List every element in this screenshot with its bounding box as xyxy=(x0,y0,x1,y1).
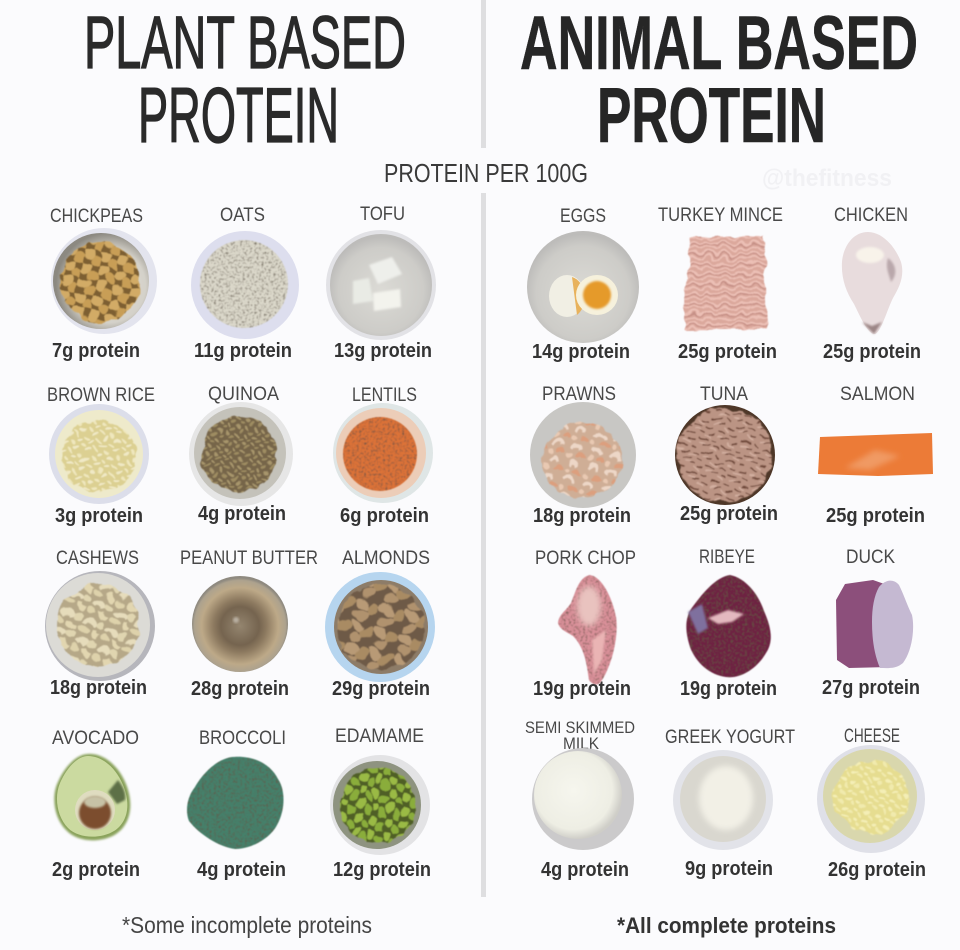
icon: bowl of prawns xyxy=(530,402,636,508)
icon: bowl of edamame xyxy=(330,755,430,855)
subtitle: PROTEIN PER 100G xyxy=(384,158,588,188)
card: semi skimmed milk xyxy=(525,718,635,881)
card: salmon: SALMON xyxy=(840,384,915,405)
watermark: @thefitness xyxy=(762,165,892,192)
icon: ribeye steak xyxy=(686,575,771,677)
card: peanut butter: PEANUT BUTTER xyxy=(180,548,318,569)
heading: animal based protein: PROTEIN xyxy=(597,71,826,159)
card: edamame: EDAMAME xyxy=(335,726,424,747)
card: cashews xyxy=(45,548,155,699)
card: avocado: 2g protein xyxy=(52,859,140,881)
card: almonds xyxy=(325,548,435,700)
card: eggs xyxy=(527,206,639,363)
card: turkey mince: 25g protein xyxy=(678,341,777,363)
card: ribeye xyxy=(680,547,777,700)
card: edamame xyxy=(330,726,431,881)
icon: turkey mince xyxy=(684,236,767,330)
card: ribeye: 19g protein xyxy=(680,678,777,700)
icon: bowl of almonds xyxy=(325,572,435,682)
card: greek yogurt xyxy=(665,727,795,880)
icon: broccoli xyxy=(187,757,284,849)
card: duck: 27g protein xyxy=(822,677,920,699)
heading: plant based protein: PROTEIN xyxy=(138,71,339,159)
card: oats: 11g protein xyxy=(194,340,292,362)
card: lentils: 6g protein xyxy=(340,505,429,527)
icon: bowl with boiled egg xyxy=(527,231,639,343)
card: broccoli: BROCCOLI xyxy=(199,728,286,749)
panel: animal based foods xyxy=(525,205,933,881)
card: duck: DUCK xyxy=(846,547,895,568)
card: tuna: TUNA xyxy=(700,384,748,405)
card: pork chop xyxy=(533,548,636,700)
card: cheese xyxy=(817,726,926,881)
card: chicken xyxy=(823,205,921,363)
card: chickpeas xyxy=(50,206,157,362)
card: broccoli: 4g protein xyxy=(197,859,286,881)
card: peanut butter: 28g protein xyxy=(191,678,289,700)
card: quinoa xyxy=(189,384,293,525)
heading: plant based protein: PLANT BASED xyxy=(84,1,406,84)
card: turkey mince xyxy=(658,205,783,363)
card: eggs: 14g protein xyxy=(532,341,630,363)
card: salmon xyxy=(818,384,933,527)
icon: bowl of lentils xyxy=(333,403,433,503)
icon: bowl of greek yogurt xyxy=(673,750,773,850)
card: chickpeas: 7g protein xyxy=(52,340,140,362)
card: oats: OATS xyxy=(220,205,265,226)
card: tuna: 25g protein xyxy=(680,503,778,525)
icon: duck breasts xyxy=(836,580,913,668)
card: brown rice: 3g protein xyxy=(55,505,143,527)
icon: salmon fillet xyxy=(818,433,933,476)
card: almonds: ALMONDS xyxy=(342,548,430,569)
card: duck xyxy=(822,547,920,699)
card: oats xyxy=(191,205,299,362)
card: semi skimmed milk: 4g protein xyxy=(541,859,629,881)
card: pork chop: PORK CHOP xyxy=(535,548,636,569)
card: edamame: 12g protein xyxy=(333,859,431,881)
card: greek yogurt: 9g protein xyxy=(685,858,773,880)
card: prawns: 18g protein xyxy=(533,505,631,527)
icon: bowl of quinoa xyxy=(189,402,293,506)
card: lentils: LENTILS xyxy=(352,385,417,406)
footnote: plant: *Some incomplete proteins xyxy=(122,912,372,938)
card: cheese: 26g protein xyxy=(828,859,926,881)
icon: bowl of oats xyxy=(191,231,299,339)
card: eggs: EGGS xyxy=(560,206,606,227)
icon: jar of peanut butter xyxy=(192,576,288,672)
card: semi skimmed milk: MILK xyxy=(563,734,600,753)
card: lentils xyxy=(333,385,433,527)
card: cheese: CHEESE xyxy=(844,726,900,747)
heading: plant based protein xyxy=(84,1,406,159)
card: greek yogurt: GREEK YOGURT xyxy=(665,727,795,748)
card: chicken: CHICKEN xyxy=(834,205,908,226)
card: turkey mince: TURKEY MINCE xyxy=(658,205,783,226)
card: tuna xyxy=(675,384,778,525)
card: cashews: 18g protein xyxy=(50,677,147,699)
icon: bowl of tofu xyxy=(326,230,436,340)
card: tofu: 13g protein xyxy=(334,340,432,362)
card: avocado xyxy=(52,728,140,881)
card: broccoli xyxy=(187,728,286,881)
card: chickpeas: CHICKPEAS xyxy=(50,206,143,227)
card: prawns: PRAWNS xyxy=(542,384,616,405)
icon: bowl of brown rice xyxy=(49,404,149,504)
card: quinoa: QUINOA xyxy=(208,384,279,405)
icon: pork chop xyxy=(558,575,617,684)
card: semi skimmed milk: SEMI SKIMMED xyxy=(525,718,635,737)
icon: bowl of milk xyxy=(532,748,634,850)
card: brown rice: BROWN RICE xyxy=(47,385,155,406)
icon: bowl of chickpeas xyxy=(51,228,157,334)
panel: plant based foods xyxy=(45,204,436,881)
divider xyxy=(481,0,486,897)
footnote: animal: *All complete proteins xyxy=(617,913,836,938)
card: almonds: 29g protein xyxy=(332,678,430,700)
card: brown rice xyxy=(47,385,155,527)
icon: bowl of cashews xyxy=(45,571,155,681)
card: prawns xyxy=(530,384,636,527)
card: salmon: 25g protein xyxy=(826,505,925,527)
heading: animal based protein xyxy=(520,1,918,159)
card: tofu xyxy=(326,204,436,362)
icon: bowl of cheese xyxy=(817,745,925,853)
card: avocado: AVOCADO xyxy=(52,728,139,749)
card: tofu: TOFU xyxy=(360,204,405,225)
card: chicken: 25g protein xyxy=(823,341,921,363)
card: ribeye: RIBEYE xyxy=(699,547,755,568)
icon: can of tuna xyxy=(675,405,775,505)
icon: avocado xyxy=(54,754,130,840)
card: cashews: CASHEWS xyxy=(56,548,139,569)
card: peanut butter xyxy=(180,548,318,700)
icon: chicken breast xyxy=(842,232,902,334)
card: pork chop: 19g protein xyxy=(533,678,631,700)
card: quinoa: 4g protein xyxy=(198,503,286,525)
